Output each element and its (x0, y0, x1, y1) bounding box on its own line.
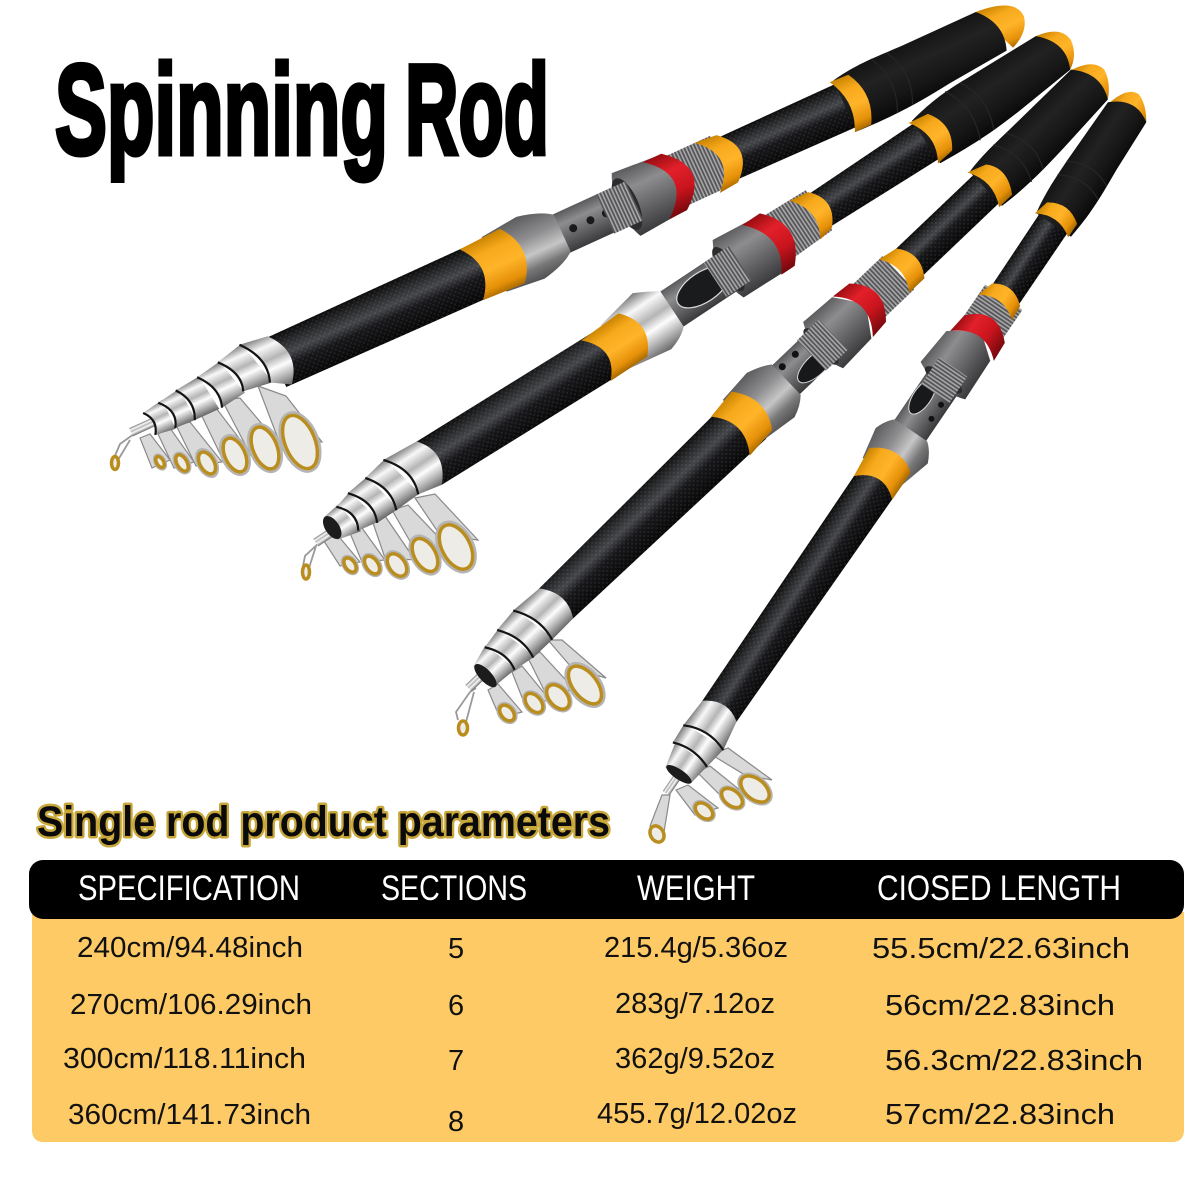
row 360cm (68, 1098, 1115, 1138)
rod 1 (112, 0, 1041, 480)
header labels (78, 869, 1121, 908)
table body panel (32, 912, 1184, 1142)
rod 3 guide rings (458, 656, 612, 735)
row 240cm (77, 932, 1130, 965)
row 270cm: 283g/7.12oz (615, 988, 775, 1020)
header labels: CIOSED LENGTH (877, 869, 1121, 908)
row 240cm: 55.5cm/22.63inch (872, 933, 1130, 965)
row 270cm: 6 (448, 990, 464, 1022)
row 240cm: 5 (448, 933, 464, 965)
rod 3 guide frames (456, 640, 606, 722)
row 270cm: 56cm/22.83inch (885, 990, 1115, 1022)
rod 4 guide rings (647, 768, 777, 845)
row 270cm: 270cm/106.29inch (70, 989, 312, 1021)
rod 3 body (443, 50, 1131, 709)
rod 1 guide frames (114, 386, 322, 468)
row 360cm: 57cm/22.83inch (885, 1099, 1115, 1131)
rod 1 body (116, 0, 1041, 463)
row 360cm: 455.7g/12.02oz (597, 1098, 797, 1130)
rod 4 guide frames (650, 748, 772, 832)
rod 2 (298, 14, 1091, 583)
row 360cm: 8 (448, 1106, 464, 1138)
rod 3 (443, 50, 1131, 735)
row 240cm: 215.4g/5.36oz (604, 932, 788, 964)
rod 4 (640, 77, 1166, 845)
row 300cm: 362g/9.52oz (615, 1043, 775, 1075)
subtitle: Single rod product parameters (37, 798, 610, 846)
rod 2 guide rings (302, 515, 484, 583)
row 240cm: 240cm/94.48inch (77, 932, 303, 964)
title: Spinning (55, 39, 388, 182)
row 300cm: 56.3cm/22.83inch (885, 1045, 1143, 1077)
row 300cm: 300cm/118.11inch (63, 1043, 306, 1075)
rod 2 guide frames (303, 494, 478, 568)
header labels: WEIGHT (637, 869, 755, 908)
rod 1 guide rings (112, 407, 328, 480)
row 270cm (70, 988, 1115, 1022)
row 300cm: 7 (448, 1045, 464, 1077)
title: Rod (405, 39, 549, 182)
rod 2 body (298, 14, 1091, 572)
header labels: SPECIFICATION (78, 869, 300, 908)
specification table (29, 860, 1184, 1142)
rod 4 body (640, 77, 1166, 811)
header labels: SECTIONS (381, 869, 527, 908)
table header bar (29, 860, 1184, 919)
row 360cm: 360cm/141.73inch (68, 1099, 311, 1131)
row 300cm (63, 1043, 1143, 1077)
